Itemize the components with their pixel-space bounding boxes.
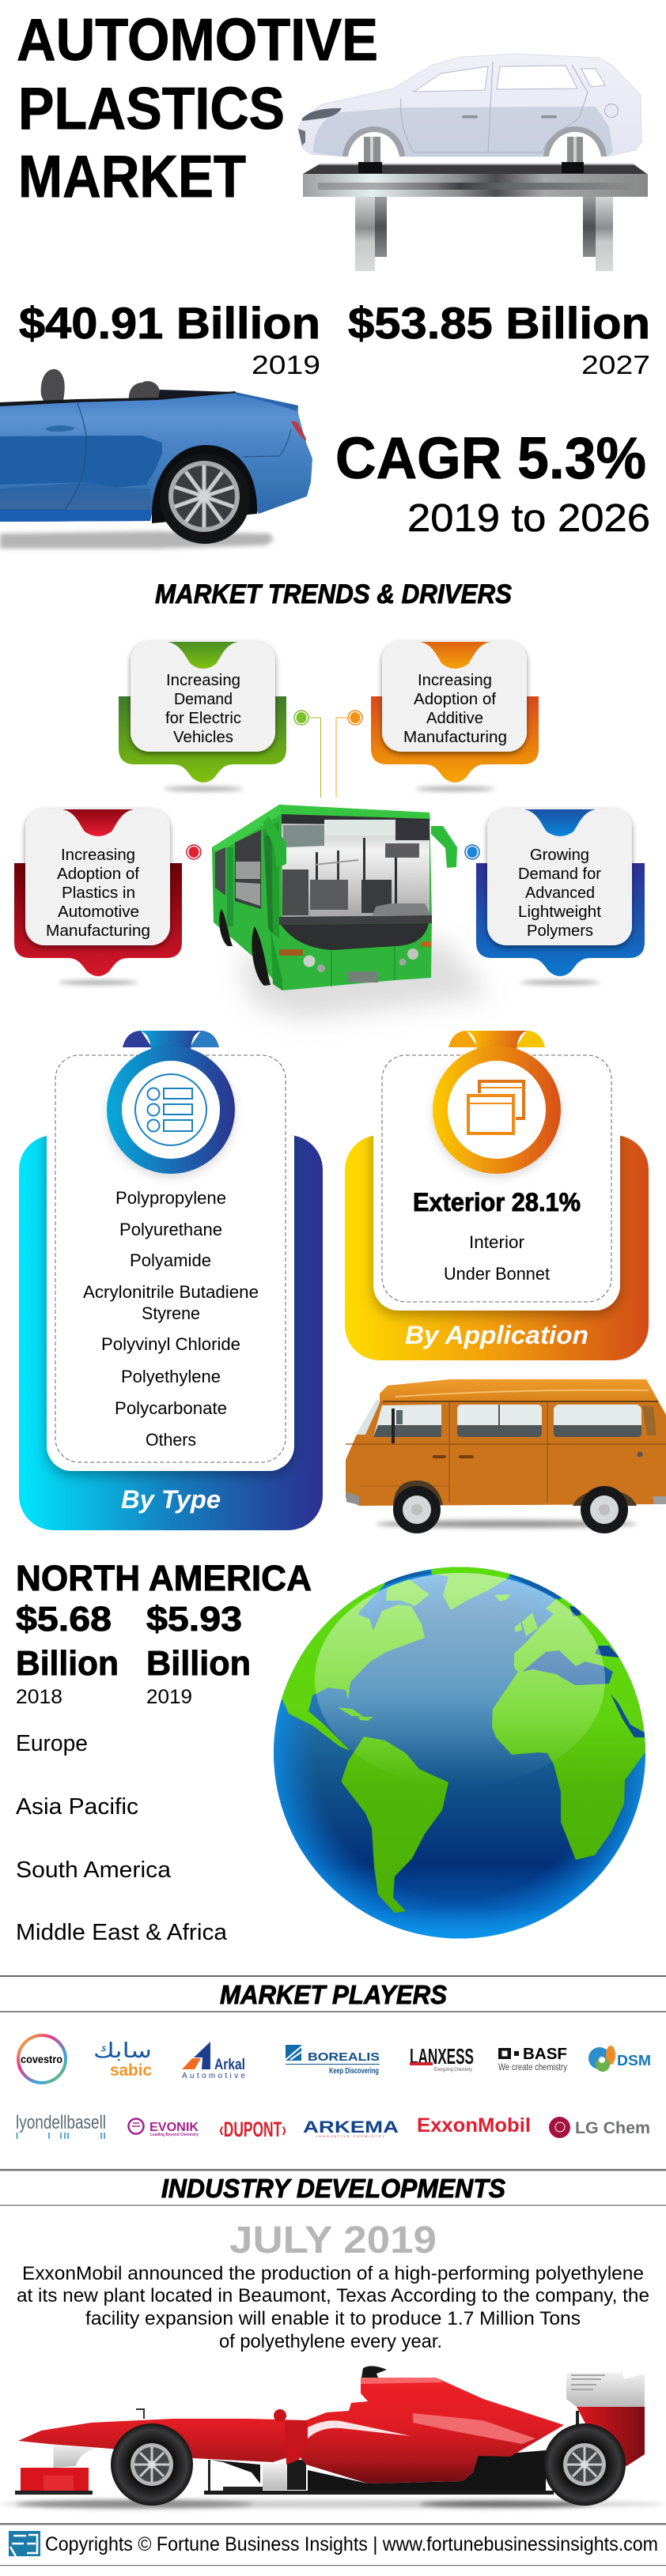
- list: applications: Under Bonnet: [444, 1264, 550, 1284]
- list: polymer types: [83, 1188, 259, 1450]
- ribbon and ring icon: windows: [433, 1031, 561, 1174]
- card: adoption of plastics: Automotive: [58, 903, 139, 921]
- panel label: by application: By Application: [405, 1321, 588, 1349]
- list: other regions: Middle East & Africa: [16, 1920, 228, 1945]
- card: additive manufacturing: Adoption of: [414, 691, 496, 708]
- list: other regions: [16, 1731, 228, 1945]
- illustration: white car body on assembly lift: [298, 54, 648, 271]
- title: MARKET: [18, 143, 246, 209]
- text block: development description: of polyethylene every year.: [219, 2331, 442, 2352]
- illustration: green bus: [212, 805, 490, 1020]
- logo: sabic: sabic: [110, 2061, 152, 2080]
- logo: arkema: INNOVATIVE CHEMISTRY: [316, 2134, 384, 2138]
- list: polymer types: Polycarbonate: [115, 1398, 227, 1418]
- connector: red: [187, 845, 201, 859]
- card: adoption of plastics: Manufacturing: [46, 922, 150, 940]
- list: polymer types: Polypropylene: [115, 1188, 226, 1208]
- logo: exxonmobil: ExxonMobil: [417, 2114, 531, 2137]
- card: lightweight polymers: Lightweight: [518, 903, 601, 921]
- illustration: orange van: [346, 1379, 666, 1533]
- regional stats: north america: $5.93: [146, 1600, 242, 1639]
- logo: basf: BASF: [523, 2046, 567, 2063]
- illustration: blue convertible car: [0, 369, 312, 549]
- regional stats: north america: $5.68: [16, 1600, 112, 1639]
- date: july 2019: JULY 2019: [229, 2220, 437, 2261]
- list: polymer types: Polyamide: [130, 1250, 211, 1270]
- card: electric vehicles: Vehicles: [173, 729, 233, 746]
- logo: evonik: Leading Beyond Chemistry: [150, 2133, 199, 2137]
- card: electric vehicles: for Electric: [165, 710, 241, 727]
- logo: covestro: covestro: [21, 2053, 62, 2065]
- list: applications: Exterior 28.1%: [413, 1188, 581, 1216]
- list: polymer types: Polyvinyl Chloride: [101, 1334, 240, 1354]
- connector: blue: [465, 845, 479, 859]
- card: additive manufacturing: [371, 641, 539, 791]
- list: polymer types: Polyethylene: [121, 1367, 221, 1386]
- logo: dsm: DSM: [617, 2053, 651, 2069]
- card: additive manufacturing: Increasing: [418, 672, 492, 689]
- regional stats: north america: 2019: [146, 1686, 192, 1708]
- logo: lg chem: [549, 2117, 650, 2138]
- list: other regions: Asia Pacific: [16, 1794, 138, 1820]
- connector: orange: [336, 711, 362, 798]
- card: electric vehicles: Demand: [174, 691, 233, 708]
- stat: 2027 market size: [348, 298, 650, 379]
- card: lightweight polymers: Demand for: [518, 866, 601, 883]
- card: adoption of plastics: Increasing: [61, 847, 135, 864]
- card: adoption of plastics: Adoption of: [57, 866, 139, 883]
- list: polymer types: Acrylonitrile Butadiene: [83, 1282, 259, 1302]
- logo: fortune business insights: [9, 2531, 40, 2556]
- logo: borealis: BOREALIS: [308, 2050, 380, 2064]
- card: additive manufacturing: Additive: [426, 710, 483, 727]
- text block: development description: ExxonMobil announced the production of a high-performing polyethylene: [22, 2263, 644, 2284]
- list: polymer types: Polyurethane: [119, 1220, 222, 1239]
- connector: green: [294, 711, 321, 798]
- text block: development description: facility expansion will enable it to produce 1.7 Million Tons: [85, 2308, 581, 2329]
- logo: sabic: [93, 2039, 152, 2080]
- logo: basf: We create chemistry: [498, 2061, 567, 2072]
- logo: dsm: [588, 2046, 651, 2072]
- regional stats: north america: Billion: [16, 1644, 119, 1683]
- panel: by application: [345, 1028, 649, 1360]
- text block: development description: [17, 2263, 649, 2352]
- list: other regions: South America: [16, 1858, 172, 1883]
- logo: lyondellbasell: [16, 2112, 106, 2139]
- card: adoption of plastics: Plastics in: [62, 884, 135, 902]
- card: additive manufacturing: Manufacturing: [403, 729, 507, 746]
- title: PLASTICS: [18, 75, 285, 141]
- heading: market players: MARKET PLAYERS: [220, 1980, 447, 2009]
- ribbon and ring icon: list: [107, 1031, 235, 1174]
- stat: 2019 market size: $40.91 Billion: [19, 298, 320, 348]
- card: electric vehicles: [119, 641, 286, 791]
- list: applications: Interior: [469, 1232, 524, 1252]
- logo: lanxess: Energizing Chemistry: [434, 2067, 473, 2072]
- card: lightweight polymers: Polymers: [527, 922, 593, 940]
- logo: evonik: [128, 2118, 199, 2137]
- stat: CAGR: [335, 425, 650, 540]
- heading: industry developments: INDUSTRY DEVELOPMENTS: [161, 2174, 505, 2203]
- stat: CAGR: CAGR 5.3%: [335, 425, 646, 491]
- logo: lyondellbasell: lyondellbasell: [16, 2112, 106, 2133]
- regional stats: north america: Billion: [146, 1644, 251, 1683]
- stat: 2027 market size: 2027: [581, 350, 650, 379]
- stat: CAGR: 2019 to 2026: [407, 497, 650, 540]
- footer: [0, 2523, 666, 2566]
- regional stats: north america: NORTH AMERICA: [16, 1558, 312, 1598]
- panel: by type: [19, 1028, 323, 1530]
- card: lightweight polymers: Growing: [530, 847, 589, 864]
- heading: market trends and drivers: MARKET TRENDS & DRIVERS: [155, 579, 512, 609]
- logo: arkal automotive: Automotive: [182, 2072, 245, 2080]
- illustration: globe: [261, 1561, 664, 1938]
- logo: arkal automotive: Arkal: [214, 2057, 245, 2073]
- regional stats: north america: 2018: [16, 1686, 62, 1708]
- logo: evonik: EVONIK: [149, 2121, 199, 2134]
- text block: development description: at its new plant located in Beaumont, Texas According to the company, the: [17, 2285, 649, 2306]
- logo: lg chem: LG Chem: [575, 2119, 650, 2137]
- card: lightweight polymers: [476, 809, 645, 985]
- logo: lanxess: [410, 2044, 474, 2072]
- title: AUTOMOTIVE: [17, 6, 378, 73]
- logo: basf: [498, 2046, 567, 2072]
- list: other regions: Europe: [16, 1731, 88, 1756]
- logo: lanxess: LANXESS: [410, 2044, 474, 2069]
- list: polymer types: Styrene: [142, 1303, 200, 1323]
- logo: dupont: ‹DUPONT›: [219, 2118, 286, 2141]
- card: lightweight polymers: Advanced: [525, 884, 595, 902]
- stat: 2019 market size: [19, 298, 320, 379]
- logo: sabic: سابك: [93, 2039, 152, 2063]
- logo: borealis: Keep Discovering: [329, 2067, 379, 2076]
- logo: covestro: [18, 2035, 66, 2083]
- list: polymer types: Others: [146, 1430, 196, 1450]
- logo: borealis: [286, 2045, 380, 2076]
- stat: 2027 market size: $53.85 Billion: [348, 298, 650, 348]
- regional stats: north america: [16, 1558, 312, 1708]
- stat: 2019 market size: 2019: [252, 350, 320, 379]
- logo: arkema: ARKEMA: [303, 2118, 399, 2137]
- logo: arkal automotive: [182, 2042, 245, 2080]
- list: applications: [413, 1188, 581, 1284]
- illustration: red formula one car: [0, 2366, 664, 2508]
- card: electric vehicles: Increasing: [166, 672, 240, 689]
- card: adoption of plastics: [14, 809, 182, 985]
- title: [17, 6, 378, 209]
- panel label: by type: By Type: [121, 1485, 221, 1514]
